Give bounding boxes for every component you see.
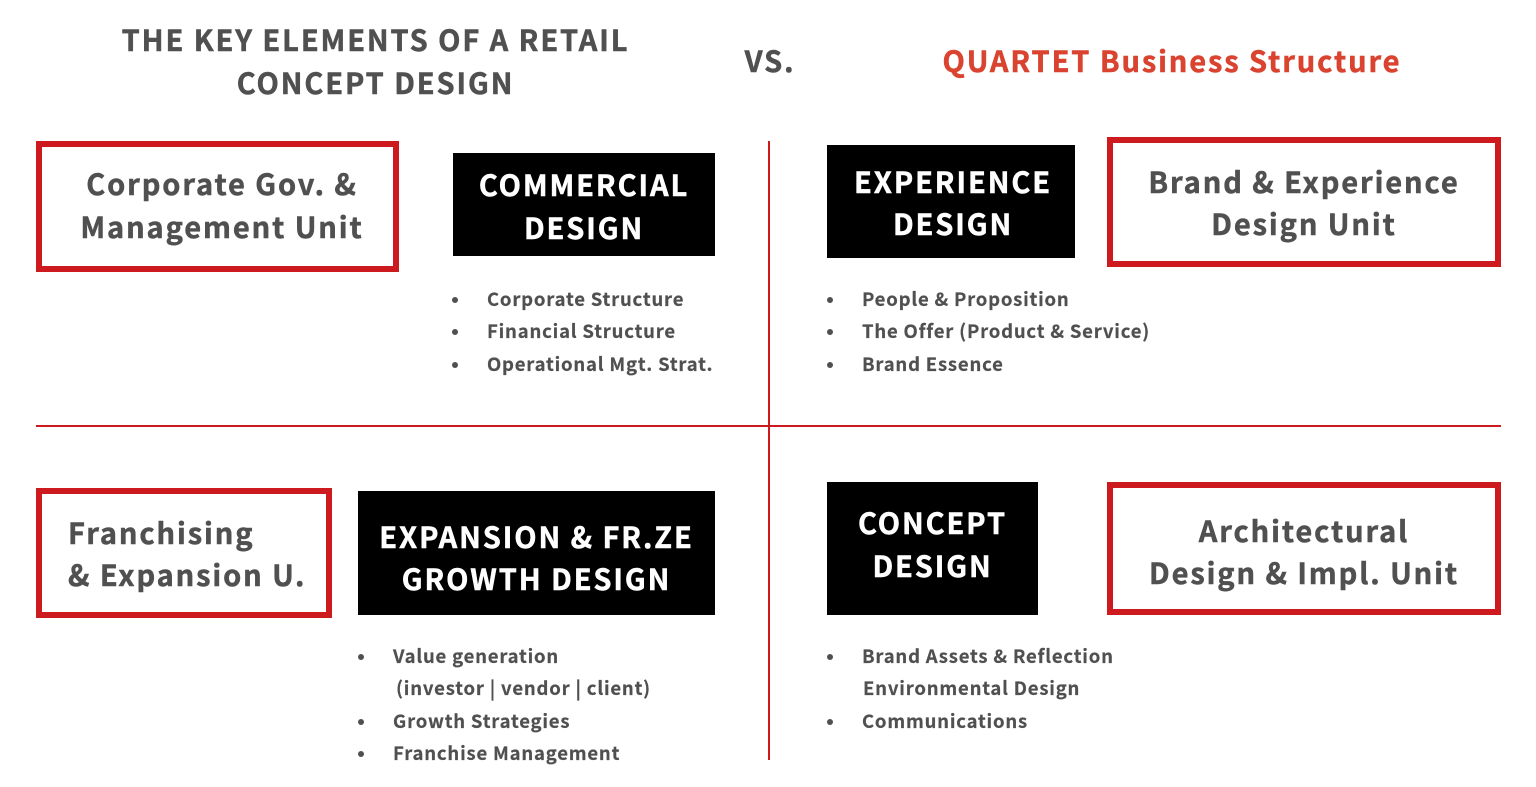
unit box: architectural design [1107, 482, 1501, 615]
heading box: concept design: CONCEPT [858, 501, 1007, 543]
heading box: experience design: DESIGN [893, 202, 1013, 244]
versus label: VS. [745, 39, 795, 81]
title: key elements [122, 18, 629, 102]
unit box: franchising: & Expansion U. [68, 553, 306, 595]
list: commercial design: Operational Mgt. Strat. [487, 351, 713, 377]
list: expansion design: Growth Strategies [393, 708, 570, 734]
heading box: commercial design: COMMERCIAL [479, 163, 689, 205]
list: experience design: People & Proposition [862, 286, 1070, 312]
unit box: brand and experience: Design Unit [1211, 202, 1397, 244]
heading box: commercial design [453, 153, 715, 256]
heading box: concept design [827, 482, 1038, 615]
title: QUARTET business structure: QUARTET Business Structure [943, 39, 1401, 81]
unit box: brand and experience [1107, 137, 1501, 267]
unit box: architectural design: Architectural [1199, 508, 1409, 550]
list: commercial design [452, 286, 713, 377]
unit box: brand and experience: Brand & Experience [1148, 160, 1460, 202]
heading box: expansion and franchise growth: EXPANSION & FR.ZE [379, 514, 694, 556]
list: concept design [827, 643, 1114, 734]
list: expansion design: Franchise Management [393, 740, 620, 766]
list: concept design: Communications [862, 708, 1028, 734]
unit box: architectural design: Design & Impl. Unit [1149, 550, 1459, 592]
list: expansion design: Value generation [393, 643, 559, 669]
unit box: corporate governance: Management Unit [80, 204, 364, 246]
heading box: experience design: EXPERIENCE [854, 160, 1052, 202]
heading box: expansion and franchise growth: GROWTH DESIGN [402, 557, 671, 599]
title: key elements: THE KEY ELEMENTS OF A RETAIL [122, 18, 629, 60]
unit box: franchising [36, 488, 332, 618]
heading box: expansion and franchise growth [358, 491, 715, 615]
list: experience design: The Offer (Product & Service) [862, 318, 1150, 344]
list: concept design: Brand Assets & Reflection [862, 643, 1114, 669]
heading box: concept design: DESIGN [872, 544, 993, 586]
unit box: corporate governance [36, 141, 399, 272]
list: commercial design: Financial Structure [487, 318, 676, 344]
unit box: corporate governance: Corporate Gov. & [86, 162, 358, 204]
unit box: franchising: Franchising [68, 510, 254, 552]
list: experience design: Brand Essence [862, 351, 1004, 377]
list: experience design [827, 286, 1150, 377]
heading box: commercial design: DESIGN [524, 206, 644, 248]
list: commercial design: Corporate Structure [487, 286, 684, 312]
heading box: experience design [827, 145, 1075, 258]
horizontal divider [36, 425, 1501, 427]
list: expansion design: (investor | vendor | client) [396, 675, 651, 701]
title: key elements: CONCEPT DESIGN [237, 60, 514, 102]
list: expansion design [358, 643, 651, 766]
list: concept design: Environmental Design [863, 675, 1080, 701]
vertical divider [768, 141, 770, 760]
